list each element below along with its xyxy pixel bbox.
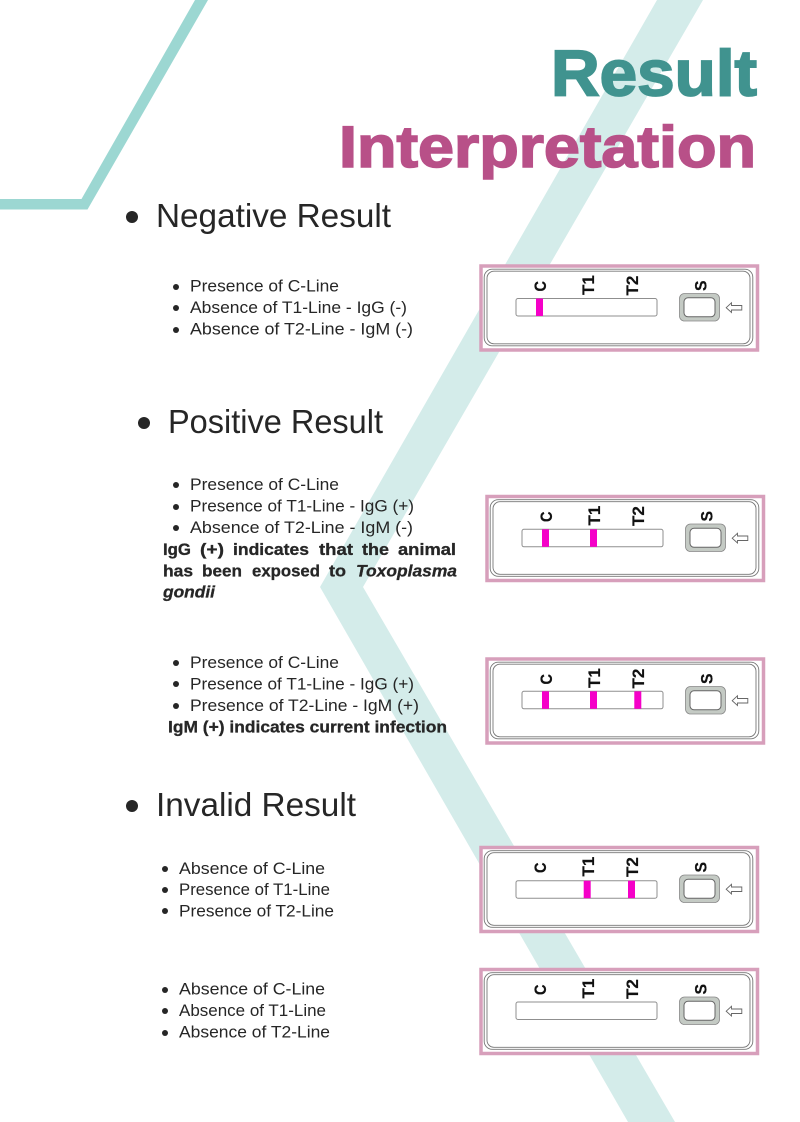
list: IgM positive lines <box>173 654 419 715</box>
test cassette: C, T1 and T2 lines <box>487 659 764 743</box>
list: invalid, all lines absent <box>162 980 330 1042</box>
note: IgG meaning: that <box>319 541 354 559</box>
note: IgG meaning: animal <box>398 541 456 559</box>
note: IgG meaning: Toxoplasma <box>356 562 457 580</box>
title line: Result: Result <box>551 36 757 110</box>
test cassette: C line only: S <box>692 280 710 291</box>
list: negative result lines: Presence of C-Line <box>190 278 339 296</box>
test cassette: T1 and T2 lines without C: T1 <box>579 857 598 876</box>
section: invalid result <box>126 786 758 1054</box>
note: IgG meaning: gondii <box>162 584 215 602</box>
test cassette: no lines: S <box>692 984 710 994</box>
list: negative result lines <box>173 278 413 338</box>
test cassette: C and T1 lines: C <box>537 512 556 522</box>
list: IgG positive lines: Absence of T2-Line - IgM (-) <box>190 519 413 537</box>
heading: positive result: Positive Result <box>168 403 383 440</box>
test cassette: C line only: C <box>531 281 550 292</box>
test cassette: C, T1 and T2 lines: T2 <box>629 669 648 688</box>
list: invalid, all lines absent: Absence of C-Line <box>179 980 325 998</box>
heading: invalid result: Invalid Result <box>156 786 356 823</box>
test cassette: C and T1 lines: S <box>698 511 716 522</box>
list: IgM positive lines: Presence of T2-Line - IgM (+) <box>190 697 419 715</box>
test cassette: no lines: T2 <box>623 979 642 999</box>
test cassette: no lines: C <box>531 984 550 995</box>
test cassette: T1 and T2 lines without C <box>481 848 758 932</box>
list: IgM positive lines: Presence of T1-Line - IgG (+) <box>190 676 414 694</box>
list: invalid, all lines absent: Absence of T1-Line <box>179 1002 326 1020</box>
list: negative result lines: Absence of T2-Line - IgM (-) <box>190 320 413 338</box>
test cassette: C and T1 lines: T2 <box>629 506 648 526</box>
test cassette: C, T1 and T2 lines: C <box>537 674 556 684</box>
list: invalid, all lines absent: Absence of T2-Line <box>179 1024 330 1042</box>
note: IgG meaning: to <box>329 562 346 580</box>
list: IgM positive lines: Presence of C-Line <box>190 654 339 672</box>
list: invalid, C line absent: Presence of T1-Line <box>179 881 330 899</box>
test cassette: C and T1 lines: T1 <box>585 506 604 526</box>
title <box>339 36 757 180</box>
note: IgG meaning: has <box>163 562 193 580</box>
list: IgG positive lines: Presence of C-Line <box>190 476 339 494</box>
list: IgG positive lines: Presence of T1-Line - IgG (+) <box>190 498 414 516</box>
section: negative result <box>126 197 758 350</box>
note: IgG meaning: (+) <box>200 541 224 559</box>
test cassette: C, T1 and T2 lines: S <box>698 674 716 684</box>
note: IgM meaning: IgM (+) indicates current infection <box>168 718 447 736</box>
list: invalid, C line absent: Absence of C-Line <box>179 860 325 878</box>
list: IgG positive lines <box>173 476 414 537</box>
note: IgG meaning: exposed <box>252 562 320 580</box>
note: IgG meaning: the <box>362 541 389 559</box>
test cassette: C line only <box>481 266 758 350</box>
note: IgG meaning: IgG <box>163 541 191 559</box>
list: invalid, C line absent <box>162 860 334 920</box>
test cassette: C line only: T1 <box>579 275 598 295</box>
list: negative result lines: Absence of T1-Line - IgG (-) <box>190 299 407 317</box>
note: IgG meaning <box>162 541 457 602</box>
test cassette: no lines <box>481 970 758 1054</box>
corner accent line <box>0 0 208 210</box>
title line: Interpretation: Interpretation <box>339 115 756 180</box>
test cassette: T1 and T2 lines without C: S <box>692 862 710 872</box>
note: IgG meaning: indicates <box>233 541 309 559</box>
test cassette: C, T1 and T2 lines: T1 <box>585 668 604 688</box>
background chevron <box>320 0 703 1122</box>
list: invalid, C line absent: Presence of T2-Line <box>179 902 334 920</box>
test cassette: T1 and T2 lines without C: C <box>531 862 550 873</box>
section: positive result <box>138 403 764 743</box>
note: IgG meaning: been <box>202 562 242 580</box>
test cassette: C and T1 lines <box>487 496 764 580</box>
test cassette: T1 and T2 lines without C: T2 <box>623 857 642 877</box>
test cassette: no lines: T1 <box>579 979 598 998</box>
test cassette: C line only: T2 <box>623 276 642 296</box>
heading: negative result: Negative Result <box>156 197 391 234</box>
